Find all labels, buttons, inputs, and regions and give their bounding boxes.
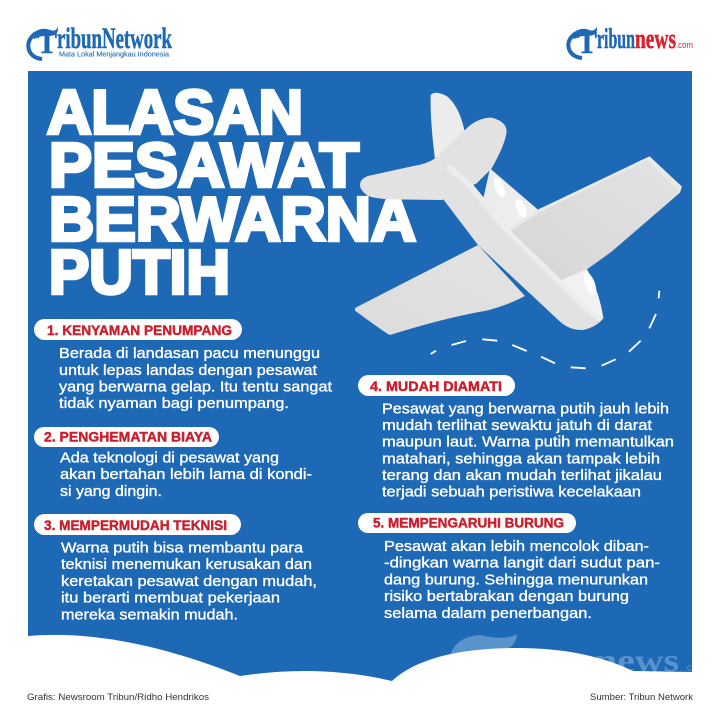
- logo: Tribun Network: [28, 22, 172, 60]
- logo: Tribunnews.com: [568, 23, 693, 60]
- title: ALASAN: [47, 78, 303, 148]
- window 1: [491, 176, 507, 199]
- body text 1: tidak nyaman bagi penumpang.: [59, 395, 289, 412]
- watermark: Tribunnews logo: news: [595, 642, 679, 678]
- body text 1: untuk lepas landas dengan pesawat: [59, 362, 318, 379]
- body text 1: Berada di landasan pacu menunggu: [59, 345, 320, 362]
- section 2: Penghematan Biaya: [34, 427, 312, 500]
- window 3: [581, 270, 599, 296]
- body text 4: maupun laut. Warna putih memantulkan: [382, 434, 674, 451]
- pill heading 4: 4. MUDAH DIAMATI: [370, 378, 502, 394]
- body text 3: Warna putih bisa membantu para: [61, 540, 304, 556]
- logo: Tribunnews.com: T: [577, 24, 597, 60]
- logo: Tribun Network: ribunNetwork: [57, 22, 172, 55]
- title: PESAWAT: [49, 132, 359, 200]
- body text 3: keretakan pesawat dengan mudah,: [61, 573, 317, 590]
- body text 4: [382, 400, 674, 501]
- keel highlight: [445, 164, 603, 322]
- body text 2: akan bertahan lebih lama di kondi-: [60, 466, 312, 483]
- illustration: white airplane: [355, 93, 682, 368]
- section 5: Mempengaruhi Burung: [358, 513, 660, 622]
- cloud: white bottom edge: [28, 635, 692, 720]
- body text 3: [61, 540, 317, 623]
- right wing: [510, 157, 682, 280]
- dashed flight path: [431, 291, 659, 368]
- logo: Tribunnews.com: .com: [676, 40, 693, 50]
- body text 5: risiko bertabrakan dengan burung: [384, 588, 629, 605]
- body text 3: itu berarti membuat pekerjaan: [61, 590, 280, 607]
- panel: blue background: [28, 71, 692, 681]
- body text 5: -dingkan warna langit dari sudut pan-: [384, 555, 660, 572]
- credit: source: Sumber: Tribun Network: [590, 692, 693, 703]
- logo: Tribun Network: T: [37, 24, 57, 60]
- body text 5: Pesawat akan lebih mencolok diban-: [384, 538, 649, 555]
- logo: Tribunnews.com: ribun: [597, 23, 635, 55]
- body text 3: teknisi menemukan kerusakan dan: [61, 556, 312, 573]
- body text 1: [59, 345, 333, 412]
- pill heading 5: 5. MEMPENGARUHI BURUNG: [373, 514, 564, 530]
- body text 4: terang dan akan mudah terlihat jikalau: [382, 467, 662, 484]
- watermark: Tribunnews logo: [450, 634, 692, 672]
- pill heading 1: 1. KENYAMAN PENUMPANG: [47, 322, 232, 338]
- pill heading 3: 3. MEMPERMUDAH TEKNISI: [44, 517, 227, 533]
- title: [47, 78, 416, 308]
- section 4: Mudah Diamati: [358, 375, 674, 501]
- keel: [431, 164, 603, 330]
- body text 1: yang berwarna gelap. Itu tentu sangat: [59, 378, 333, 396]
- body text 4: terjadi sebuah peristiwa kecelakaan: [382, 484, 641, 501]
- body text 4: matahari, sehingga akan tampak lebih: [382, 450, 660, 467]
- body text 5: selama dalam penerbangan.: [384, 605, 592, 622]
- section 3: Mempermudah Teknisi: [34, 514, 317, 623]
- tailplane: [360, 118, 507, 200]
- pill heading 2: 2. PENGHEMATAN BIAYA: [44, 428, 212, 444]
- watermark: Tribunnews logo: .com: [684, 662, 706, 674]
- section 1: Kenyaman Penumpang: [34, 319, 333, 412]
- body text 5: [384, 538, 660, 622]
- pill heading 3: [34, 514, 241, 535]
- fuselage: [480, 168, 603, 330]
- logo: Tribunnews.com: news: [635, 23, 676, 55]
- right wing edge: [508, 156, 682, 231]
- body text 3: mereka semakin mudah.: [61, 606, 238, 623]
- logo: Tribun Network: Mata Lokal Menjangkau Indonesia: [59, 50, 170, 58]
- pill heading 1: [34, 319, 242, 340]
- body text 4: mudah terlihat sewaktu jatuh di darat: [382, 417, 653, 434]
- credit: graphic author: Grafis: Newsroom Tribun/Ridho Hendrikos: [27, 692, 209, 703]
- pill heading 4: [358, 375, 515, 396]
- window 2: [513, 197, 529, 219]
- body text 4: Pesawat yang berwarna putih jauh lebih: [382, 400, 669, 417]
- title: PUTIH: [49, 238, 230, 308]
- body text 5: dang burung. Sehingga menurunkan: [384, 571, 648, 588]
- body text 2: [60, 450, 312, 500]
- lower left wing: [355, 245, 525, 335]
- body text 2: Ada teknologi di pesawat yang: [60, 450, 279, 466]
- body text 2: si yang dingin.: [60, 483, 162, 500]
- title: BERWARNA: [49, 186, 416, 254]
- tail fin: [431, 93, 465, 159]
